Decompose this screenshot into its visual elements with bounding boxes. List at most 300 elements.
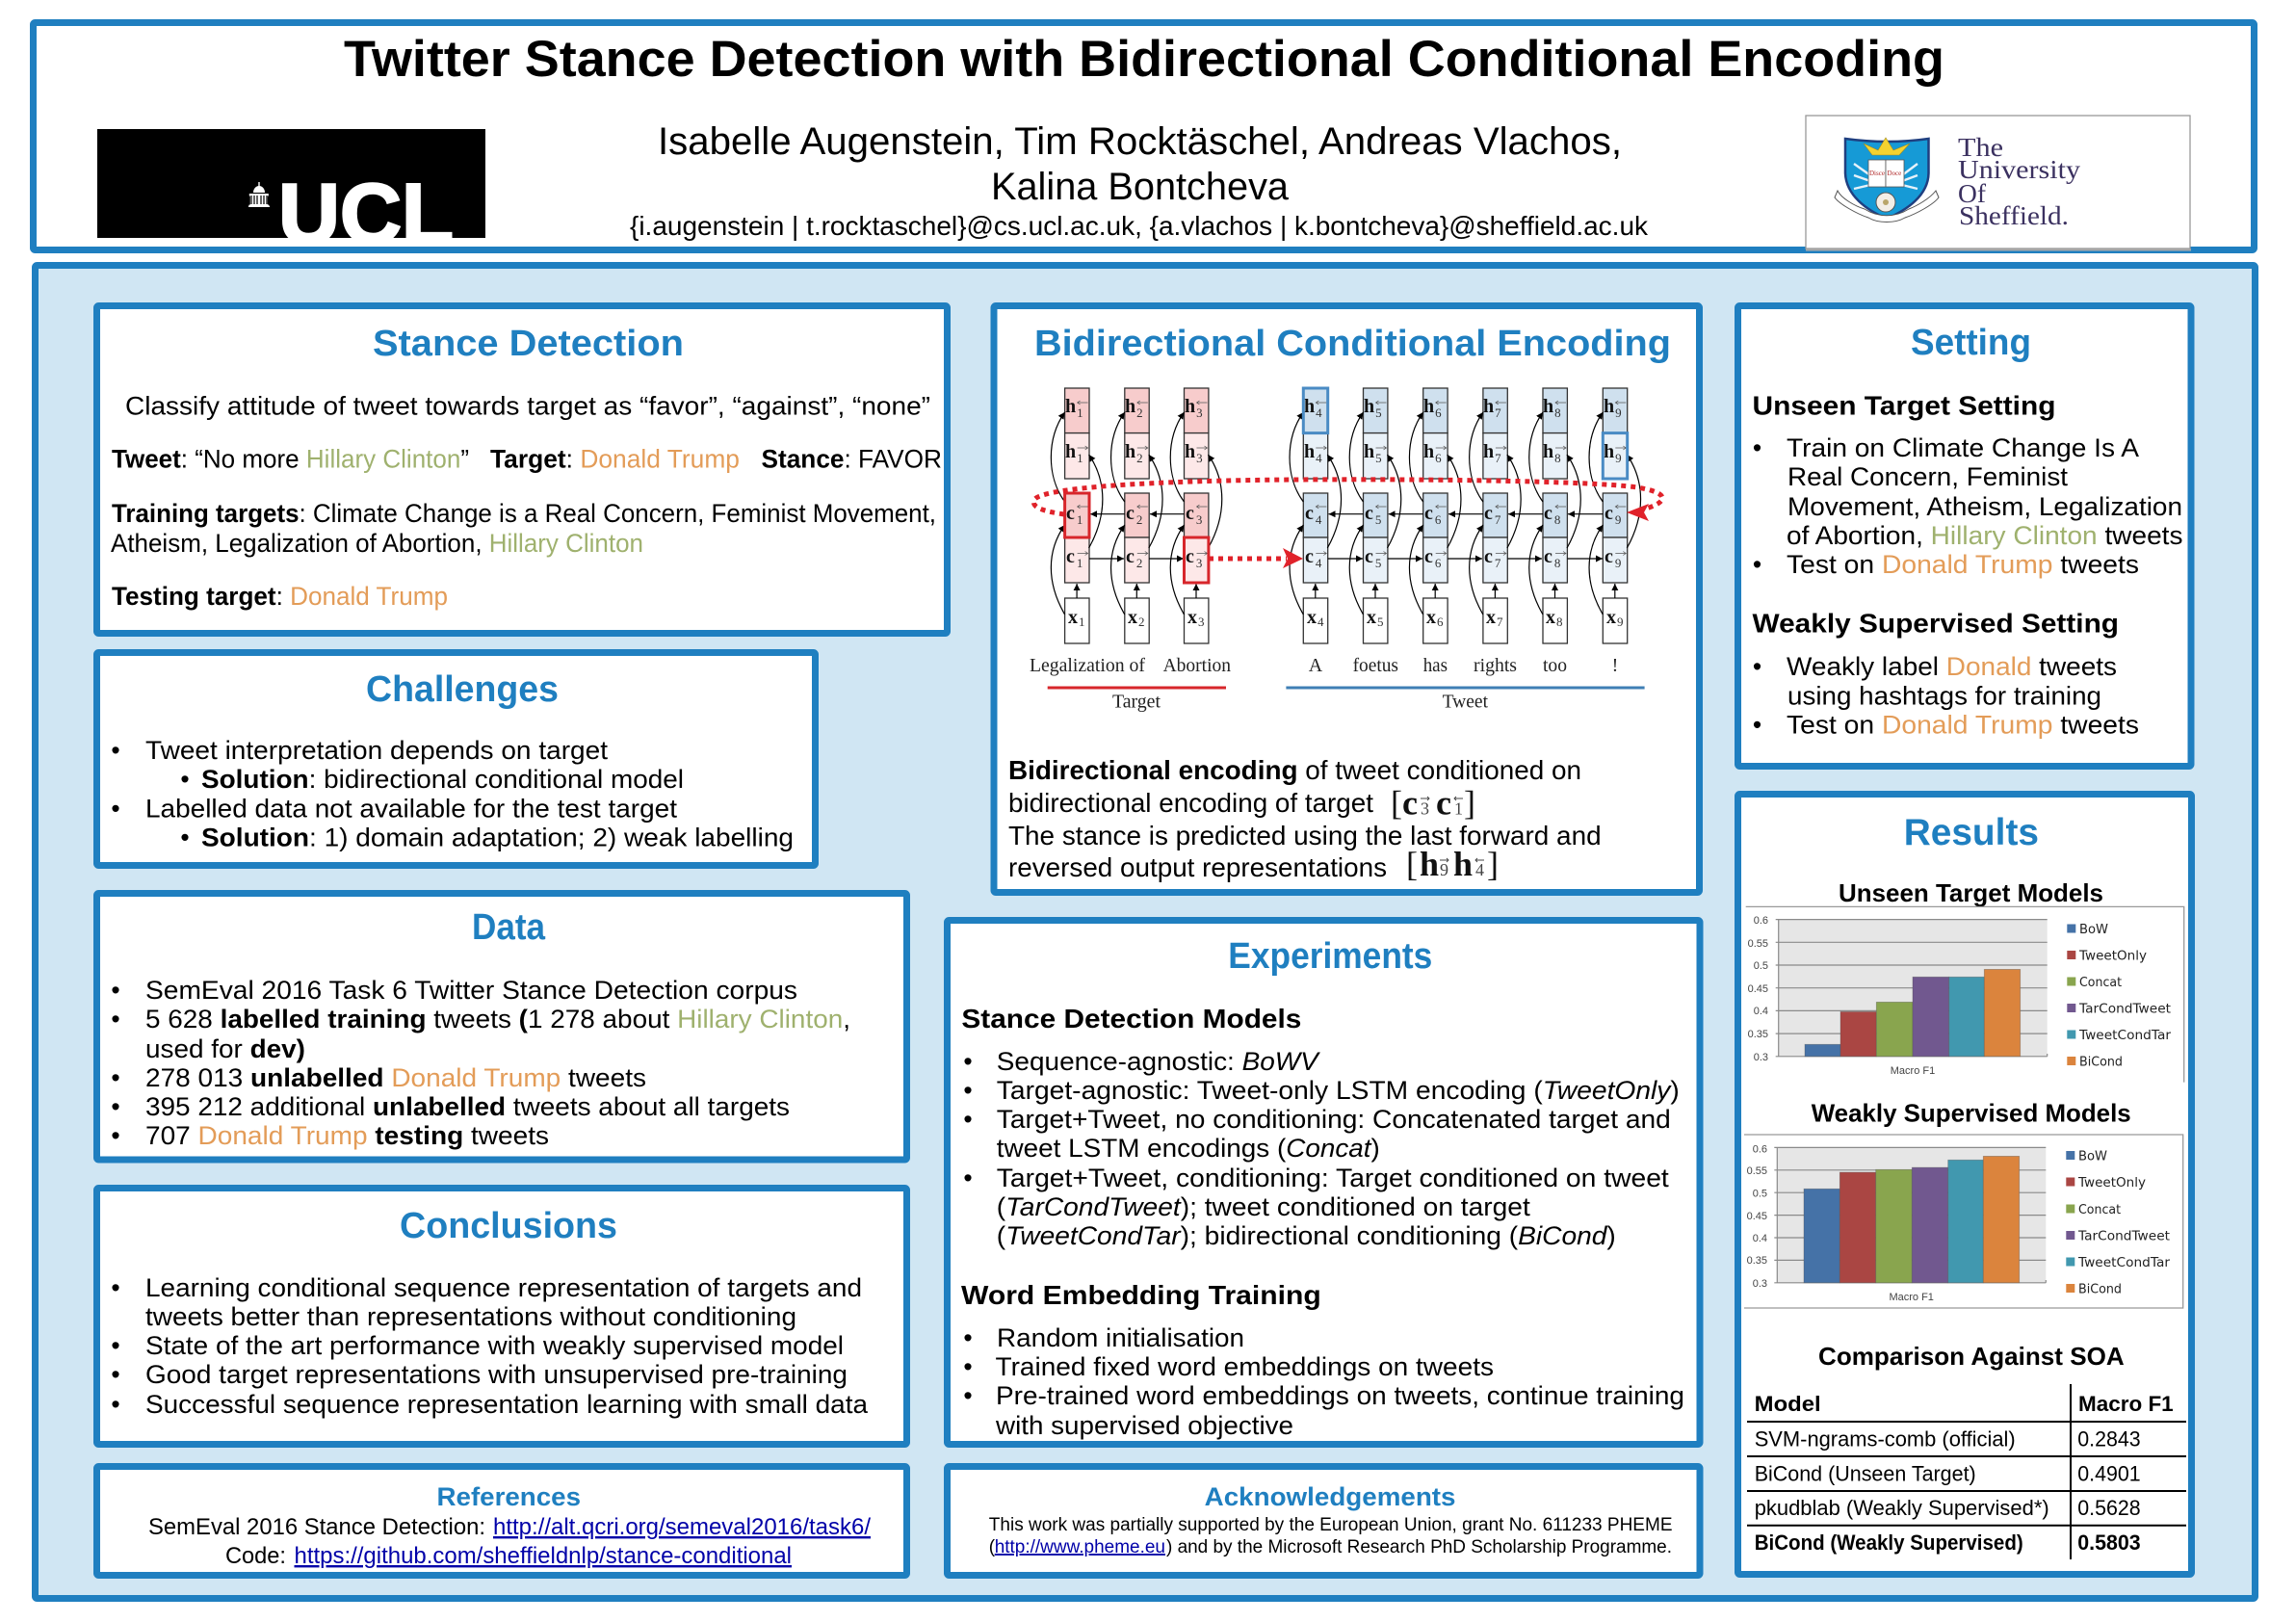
cell labels: c <box>1126 503 1135 524</box>
y axis labels: 0.35 <box>1748 1029 1768 1040</box>
cell labels: h <box>1543 396 1553 417</box>
y axis labels: 0.6 <box>1753 1144 1767 1156</box>
cell labels: h <box>1423 396 1434 417</box>
panel: Acknowledgements <box>948 1466 1700 1576</box>
tweet word labels: A <box>1309 655 1323 676</box>
cell labels: 6 <box>1435 451 1442 465</box>
reference links <box>148 1514 871 1569</box>
cell labels: 2 <box>1138 615 1144 629</box>
embedding bullets: Random initialisation <box>997 1323 1244 1352</box>
unseen target bullets: Movement, Atheism, Legalization <box>1787 492 2182 521</box>
model bullets: Target+Tweet, no conditioning: Concatenated target and <box>997 1105 1671 1134</box>
embedding bullets: • <box>963 1323 973 1352</box>
y axis labels: 0.4 <box>1753 1233 1767 1244</box>
model bullets: (TarCondTweet ); tweet conditioned on target <box>997 1192 1530 1221</box>
task definition text: Classify attitude of tweet towards target as “favor”, “against”, “none” <box>125 391 930 420</box>
cell labels: 6 <box>1435 556 1442 570</box>
cell labels: x <box>1606 607 1616 628</box>
cell labels: 7 <box>1495 512 1501 527</box>
cell labels: h <box>1185 441 1195 462</box>
subheading: Word Embedding Training: Word Embedding Training <box>961 1280 1321 1310</box>
panel: Data <box>96 894 907 1160</box>
weakly supervised bullets: Weakly label Donald tweets <box>1787 652 2117 681</box>
challenge bullets <box>111 736 794 851</box>
legend: TweetOnly <box>2077 1176 2146 1190</box>
cell labels: 4 <box>1318 615 1324 629</box>
unseen target bullets: Real Concern, Feminist <box>1787 462 2069 491</box>
legend: BoW <box>2078 1150 2107 1164</box>
data bullets: • <box>111 1121 120 1150</box>
university wordmark: Of <box>1958 179 1986 208</box>
y axis labels: 0.4 <box>1754 1006 1768 1017</box>
cell labels: c <box>1186 546 1194 567</box>
model bullets: Target-agnostic: Tweet-only LSTM encoding ( TweetOnly ) <box>997 1076 1680 1105</box>
formula: target representation: c <box>1402 784 1418 823</box>
cell labels: c <box>1126 546 1135 567</box>
x axis label: Macro F1 <box>1891 1065 1935 1077</box>
cell labels: 5 <box>1375 556 1381 570</box>
cell labels: h <box>1125 441 1135 462</box>
legend: Concat <box>2079 976 2122 990</box>
logo: UCL: UCL <box>278 166 454 261</box>
legend <box>2066 1150 2171 1296</box>
cell labels: h <box>1543 441 1553 462</box>
training targets: Atheism, Legalization of Abortion, Hillary Clinton <box>111 529 643 558</box>
data bullets: 395 212 additional unlabelled tweets about all targets <box>145 1092 790 1121</box>
column arrows <box>1051 401 1641 615</box>
cell labels: 1 <box>1079 615 1084 629</box>
cell labels: 9 <box>1615 406 1622 420</box>
heading: Setting: Setting <box>1911 323 2031 363</box>
cell labels: 1 <box>1077 451 1083 465</box>
y axis labels: 0.45 <box>1747 1211 1767 1222</box>
cell labels: h <box>1065 396 1076 417</box>
weakly supervised bullets <box>1753 652 2139 740</box>
table: comparison against SOA <box>1747 1384 2186 1559</box>
cell labels: 2 <box>1136 451 1143 465</box>
cell labels: 8 <box>1554 556 1560 570</box>
cell labels: h <box>1304 396 1315 417</box>
cell labels: 7 <box>1497 615 1503 629</box>
tweet column boxes <box>1303 388 1628 643</box>
reference links: http://alt.qcri.org/semeval2016/task6/ <box>493 1514 871 1540</box>
highlighted cells <box>1065 388 1628 583</box>
cell labels: c <box>1484 503 1493 524</box>
cell labels: 1 <box>1077 512 1083 527</box>
data bullets: • <box>111 1092 120 1121</box>
conclusion bullets: • <box>111 1390 120 1419</box>
challenge bullets: Solution: 1) domain adaptation; 2) weak labelling <box>201 823 794 851</box>
example tweet line: Target: Donald Trump <box>490 445 740 474</box>
cell labels: c <box>1305 546 1314 567</box>
formula: target representation: [ <box>1391 784 1402 823</box>
challenge bullets: • <box>111 794 120 823</box>
reference links: https://github.com/sheffieldnlp/stance-conditional <box>295 1543 792 1569</box>
cell labels: 3 <box>1196 406 1203 420</box>
embedding bullets: Pre-trained word embeddings on tweets, continue training <box>996 1381 1684 1410</box>
formula: tweet representation: ] <box>1487 845 1499 883</box>
cell labels: c <box>1544 503 1552 524</box>
description text: The stance is predicted using the last forward and <box>1008 821 1602 850</box>
cell labels: c <box>1605 546 1613 567</box>
formula: tweet representation: [ <box>1406 845 1418 883</box>
cell labels: 3 <box>1198 615 1204 629</box>
chart title: Weakly Supervised Models: Weakly Supervised Models <box>1812 1098 2131 1127</box>
formula: target representation: 1 <box>1454 799 1463 819</box>
data bullets: • <box>111 1063 120 1092</box>
university wordmark: The <box>1958 133 2003 162</box>
table: comparison against SOA: BiCond (Unseen Target) <box>1755 1462 1976 1485</box>
cell labels: 2 <box>1136 556 1142 570</box>
table title: Comparison Against SOA: Comparison Against SOA <box>1818 1342 2125 1371</box>
y axis labels <box>1747 1144 1767 1290</box>
challenge bullets: Labelled data not available for the test target <box>145 794 678 823</box>
heading: Results: Results <box>1904 812 2039 853</box>
cell labels: 8 <box>1556 615 1562 629</box>
cell labels: 7 <box>1495 406 1501 420</box>
cell labels: x <box>1187 607 1197 628</box>
table: comparison against SOA: 0.2843 <box>2077 1427 2141 1451</box>
weakly supervised bullets: Test on Donald Trump tweets <box>1787 711 2139 740</box>
logo: University of Sheffield: Doce <box>1888 170 1901 177</box>
conclusion bullets: • <box>111 1273 120 1302</box>
cell labels: h <box>1125 396 1135 417</box>
cell labels: 9 <box>1615 451 1622 465</box>
subheading: Weakly Supervised Setting: Weakly Supervised Setting <box>1753 609 2119 638</box>
heading: Bidirectional Conditional Encoding: Bidirectional Conditional Encoding <box>1034 324 1671 364</box>
y axis labels: 0.35 <box>1747 1255 1767 1267</box>
model bullets: Target+Tweet, conditioning: Target conditioned on tweet <box>997 1164 1669 1192</box>
arrow: dotted target to tweet conditioning <box>1209 548 1303 568</box>
target word labels <box>1030 655 1231 676</box>
cell labels: h <box>1185 396 1195 417</box>
legend: TweetCondTar <box>2077 1256 2171 1270</box>
y axis labels: 0.5 <box>1754 960 1768 972</box>
y axis labels: 0.3 <box>1754 1052 1768 1063</box>
diagram: conditional LSTM network <box>1030 388 1662 713</box>
conclusion bullets: Successful sequence representation learning with small data <box>145 1390 868 1419</box>
y axis labels: 0.45 <box>1748 983 1768 995</box>
model bullets <box>963 1047 1680 1250</box>
panel: References <box>96 1466 907 1576</box>
cell labels: c <box>1066 503 1075 524</box>
cell labels: 9 <box>1615 556 1621 570</box>
cell labels: c <box>1365 503 1373 524</box>
weakly supervised bullets: • <box>1753 711 1761 740</box>
cell labels: x <box>1307 607 1317 628</box>
training targets: Training targets: Climate Change is a Real Concern, Feminist Movement, <box>112 499 936 528</box>
cell labels: 7 <box>1495 556 1501 570</box>
cell labels: c <box>1484 546 1493 567</box>
table: comparison against SOA: 0.4901 <box>2077 1462 2141 1485</box>
conclusion bullets <box>111 1273 868 1419</box>
panel: Conclusions <box>96 1189 907 1445</box>
logo: University of Sheffield: Disce <box>1869 170 1885 177</box>
cell labels: 1 <box>1077 406 1083 420</box>
bar chart: Weakly Supervised Models <box>1744 1135 2183 1308</box>
unseen target bullets: • <box>1753 433 1761 462</box>
data bullets: • <box>111 1005 120 1033</box>
legend: BiCond <box>2079 1056 2123 1069</box>
tweet brace line and label: Tweet <box>1443 692 1488 713</box>
formula: target representation: ] <box>1464 784 1475 823</box>
cell labels: x <box>1128 607 1137 628</box>
y axis labels: 0.3 <box>1753 1278 1767 1290</box>
heading: Conclusions: Conclusions <box>400 1206 617 1246</box>
data bullets: SemEval 2016 Task 6 Twitter Stance Detection corpus <box>145 976 797 1005</box>
author emails: {i.augenstein | t.rocktaschel}@cs.ucl.ac.uk, {a.vlachos | k.bontcheva}@sheffield.ac.uk <box>630 211 1649 241</box>
cell labels: 8 <box>1554 406 1561 420</box>
bar chart: Unseen Target Models <box>1746 906 2184 1083</box>
cell labels: x <box>1486 607 1496 628</box>
cell labels: 3 <box>1196 556 1202 570</box>
cell labels: 5 <box>1375 406 1382 420</box>
description text: Bidirectional encoding of tweet conditioned on <box>1008 755 1581 785</box>
data bullets <box>111 976 850 1150</box>
challenge bullets: • <box>111 736 120 765</box>
y axis labels: 0.5 <box>1753 1189 1767 1200</box>
testing target: Testing target: Donald Trump <box>112 582 448 611</box>
target word labels: Legalization of <box>1030 655 1145 676</box>
data bullets: • <box>111 976 120 1005</box>
panel: Setting <box>1737 306 2191 767</box>
data bullets: 5 628 labelled training tweets (1 278 about Hillary Clinton , <box>145 1005 850 1033</box>
cell labels: 7 <box>1495 451 1501 465</box>
reference links: Code: <box>225 1543 286 1569</box>
cell labels: c <box>1365 546 1373 567</box>
cell labels: h <box>1483 441 1494 462</box>
cell labels: c <box>1424 503 1433 524</box>
weakly supervised bullets: using hashtags for training <box>1787 682 2101 711</box>
logo: UCL <box>97 129 485 238</box>
embedding bullets: with supervised objective <box>995 1411 1293 1440</box>
acknowledgement text: http://www.pheme.eu <box>995 1537 1165 1557</box>
y axis labels: 0.6 <box>1754 915 1768 927</box>
cell labels: 5 <box>1375 512 1381 527</box>
header panel <box>33 23 2254 250</box>
cell labels: 6 <box>1435 406 1442 420</box>
university wordmark: Sheffield. <box>1959 201 2069 230</box>
table: comparison against SOA: 0.5628 <box>2077 1496 2141 1520</box>
main background panel <box>35 266 2256 1599</box>
acknowledgement text: ) and by the Microsoft Research PhD Scholarship Programme. <box>1166 1537 1672 1557</box>
model bullets: Sequence-agnostic: BoWV <box>997 1047 1320 1076</box>
heading: Data: Data <box>472 907 546 948</box>
training targets <box>111 499 936 558</box>
cell labels: x <box>1367 607 1376 628</box>
legend: TweetOnly <box>2078 950 2147 963</box>
cell labels: h <box>1364 396 1374 417</box>
formula: tweet representation: 4 <box>1475 860 1484 879</box>
legend <box>2067 923 2172 1069</box>
x axis label: Macro F1 <box>1889 1292 1934 1303</box>
cell labels: 4 <box>1316 451 1322 465</box>
acknowledgement text: This work was partially supported by the European Union, grant No. 611233 PHEME <box>989 1515 1672 1535</box>
formula: tweet representation: h <box>1420 845 1439 883</box>
cell labels: 8 <box>1554 451 1561 465</box>
data bullets: 707 Donald Trump testing tweets <box>145 1121 549 1150</box>
cell labels: 2 <box>1136 512 1142 527</box>
conclusion bullets: • <box>111 1360 120 1389</box>
cell labels: 6 <box>1435 512 1442 527</box>
bars <box>1805 969 2021 1057</box>
formula: target representation: 3 <box>1421 799 1429 819</box>
conclusion bullets: State of the art performance with weakly supervised model <box>145 1331 844 1360</box>
embedding bullets: Trained fixed word embeddings on tweets <box>996 1352 1494 1381</box>
table: comparison against SOA: SVM-ngrams-comb (official) <box>1755 1427 2016 1451</box>
heading: Stance Detection: Stance Detection <box>373 324 684 364</box>
heading: Experiments: Experiments <box>1228 936 1432 977</box>
subheading: Stance Detection Models: Stance Detection Models <box>961 1004 1301 1033</box>
target brace line and label: Target <box>1112 692 1161 713</box>
embedding bullets: • <box>963 1352 973 1381</box>
heading: Acknowledgements: Acknowledgements <box>1205 1482 1456 1511</box>
table: comparison against SOA: BiCond (Weakly Supervised) <box>1755 1530 2023 1555</box>
authors: Isabelle Augenstein, Tim Rocktäschel, Andreas Vlachos, <box>658 120 1622 163</box>
legend: TarCondTweet <box>2078 1002 2171 1017</box>
data bullets: 278 013 unlabelled Donald Trump tweets <box>145 1063 646 1092</box>
legend: BiCond <box>2078 1283 2122 1296</box>
example tweet line: Stance: FAVOR <box>761 445 942 474</box>
tweet word labels: rights <box>1474 655 1517 676</box>
weakly supervised bullets: • <box>1753 652 1761 681</box>
acknowledgement text: ( <box>989 1537 996 1557</box>
cell labels: x <box>1068 607 1078 628</box>
authors: Kalina Bontcheva <box>991 166 1290 208</box>
unseen target bullets <box>1753 433 2182 579</box>
target word labels: Abortion <box>1163 655 1231 676</box>
table: comparison against SOA: Macro F1 <box>2078 1392 2174 1416</box>
y axis labels: 0.55 <box>1747 1165 1767 1177</box>
challenge bullets: • <box>180 765 190 794</box>
cell labels: h <box>1483 396 1494 417</box>
unseen target bullets: Test on Donald Trump tweets <box>1787 550 2139 579</box>
cell labels: 5 <box>1375 451 1382 465</box>
legend: TweetCondTar <box>2078 1029 2172 1043</box>
model bullets: • <box>963 1076 973 1105</box>
unseen target bullets: • <box>1753 550 1761 579</box>
conclusion bullets: Good target representations with unsupervised pre-training <box>145 1360 848 1389</box>
cell labels: h <box>1423 441 1434 462</box>
cell labels: 8 <box>1554 512 1560 527</box>
formula: target representation <box>1391 784 1475 823</box>
conclusion bullets: • <box>111 1331 120 1360</box>
cell labels: h <box>1364 441 1374 462</box>
cell labels: x <box>1546 607 1555 628</box>
challenge bullets: Tweet interpretation depends on target <box>145 736 609 765</box>
conclusion bullets: tweets better than representations without conditioning <box>145 1302 796 1331</box>
formula: target representation: c <box>1436 784 1451 823</box>
acknowledgement text <box>989 1515 1672 1557</box>
cell labels: 3 <box>1196 451 1203 465</box>
title: Twitter Stance Detection with Bidirectional Conditional Encoding <box>344 31 1944 88</box>
legend: TarCondTweet <box>2077 1229 2170 1244</box>
bars <box>1804 1156 2020 1283</box>
panel: Bidirectional Conditional Encoding <box>994 306 1699 892</box>
university wordmark <box>1958 133 2081 230</box>
description text <box>1008 755 1602 882</box>
logo: University of Sheffield <box>1806 116 2191 250</box>
panel: Experiments <box>948 921 1700 1445</box>
data bullets: used for dev) <box>145 1034 305 1063</box>
tweet word labels <box>1309 655 1618 676</box>
model bullets: (TweetCondTar ); bidirectional conditioning ( BiCond) <box>997 1221 1616 1250</box>
subheading: Unseen Target Setting: Unseen Target Setting <box>1753 391 2055 420</box>
table: comparison against SOA: Model <box>1755 1392 1821 1416</box>
panel: Stance Detection <box>96 306 948 634</box>
heading: Challenges: Challenges <box>366 669 559 710</box>
challenge bullets: • <box>180 823 190 851</box>
cell labels: h <box>1304 441 1315 462</box>
cell labels: h <box>1065 441 1076 462</box>
cell labels: 9 <box>1615 512 1621 527</box>
y axis labels <box>1748 915 1768 1063</box>
cell labels: c <box>1605 503 1613 524</box>
tweet word labels: too <box>1543 655 1567 676</box>
formula: tweet representation: h <box>1453 845 1473 883</box>
cell labels: c <box>1544 546 1552 567</box>
conclusion bullets: Learning conditional sequence representation of targets and <box>145 1273 862 1302</box>
cell labels: h <box>1604 441 1614 462</box>
model bullets: • <box>963 1164 973 1192</box>
model bullets: • <box>963 1105 973 1134</box>
authors <box>658 120 1622 208</box>
formula: tweet representation <box>1406 845 1499 883</box>
cell labels: 4 <box>1316 406 1322 420</box>
cell labels: 5 <box>1377 615 1383 629</box>
description text: reversed output representations <box>1008 852 1387 882</box>
challenge bullets: Solution: bidirectional conditional model <box>201 765 684 794</box>
tweet word labels: ! <box>1612 655 1618 676</box>
cell labels: h <box>1604 396 1614 417</box>
model bullets: tweet LSTM encodings ( Concat) <box>997 1134 1380 1163</box>
chart title: Unseen Target Models: Unseen Target Models <box>1839 878 2103 907</box>
heading: References: References <box>437 1482 581 1511</box>
cell labels: c <box>1305 503 1314 524</box>
unseen target bullets: of Abortion, Hillary Clinton tweets <box>1787 521 2182 550</box>
cell labels: c <box>1186 503 1194 524</box>
unseen target bullets: Train on Climate Change Is A <box>1787 433 2139 462</box>
cell labels: 4 <box>1316 556 1322 570</box>
legend: Concat <box>2078 1203 2121 1217</box>
university wordmark: University <box>1958 155 2081 184</box>
arrow: dotted loop from tweet end to target start <box>1033 480 1662 521</box>
cell labels: c <box>1424 546 1433 567</box>
description text: bidirectional encoding of target <box>1008 788 1373 818</box>
tweet word labels: foetus <box>1353 655 1398 676</box>
target column boxes <box>1065 388 1209 643</box>
panel: Results <box>1737 794 2192 1574</box>
example tweet line <box>112 445 942 474</box>
cell labels: 3 <box>1196 512 1202 527</box>
cell labels: c <box>1066 546 1075 567</box>
example tweet line: Tweet: “No more Hillary Clinton” <box>112 445 469 474</box>
cell labels: 9 <box>1617 615 1624 629</box>
y axis labels: 0.55 <box>1748 938 1768 950</box>
tweet word labels: has <box>1423 655 1448 676</box>
table: comparison against SOA: 0.5803 <box>2077 1530 2141 1555</box>
legend: BoW <box>2079 923 2108 937</box>
cell labels: 6 <box>1437 615 1444 629</box>
embedding bullets <box>963 1323 1684 1440</box>
formula: tweet representation: 9 <box>1440 860 1448 879</box>
reference links: SemEval 2016 Stance Detection: <box>148 1514 485 1540</box>
panel: Challenges <box>96 653 815 865</box>
cell labels: 2 <box>1136 406 1143 420</box>
table: comparison against SOA: pkudblab (Weakly Supervised*) <box>1755 1496 2049 1520</box>
embedding bullets: • <box>963 1381 973 1410</box>
model bullets: • <box>963 1047 973 1076</box>
